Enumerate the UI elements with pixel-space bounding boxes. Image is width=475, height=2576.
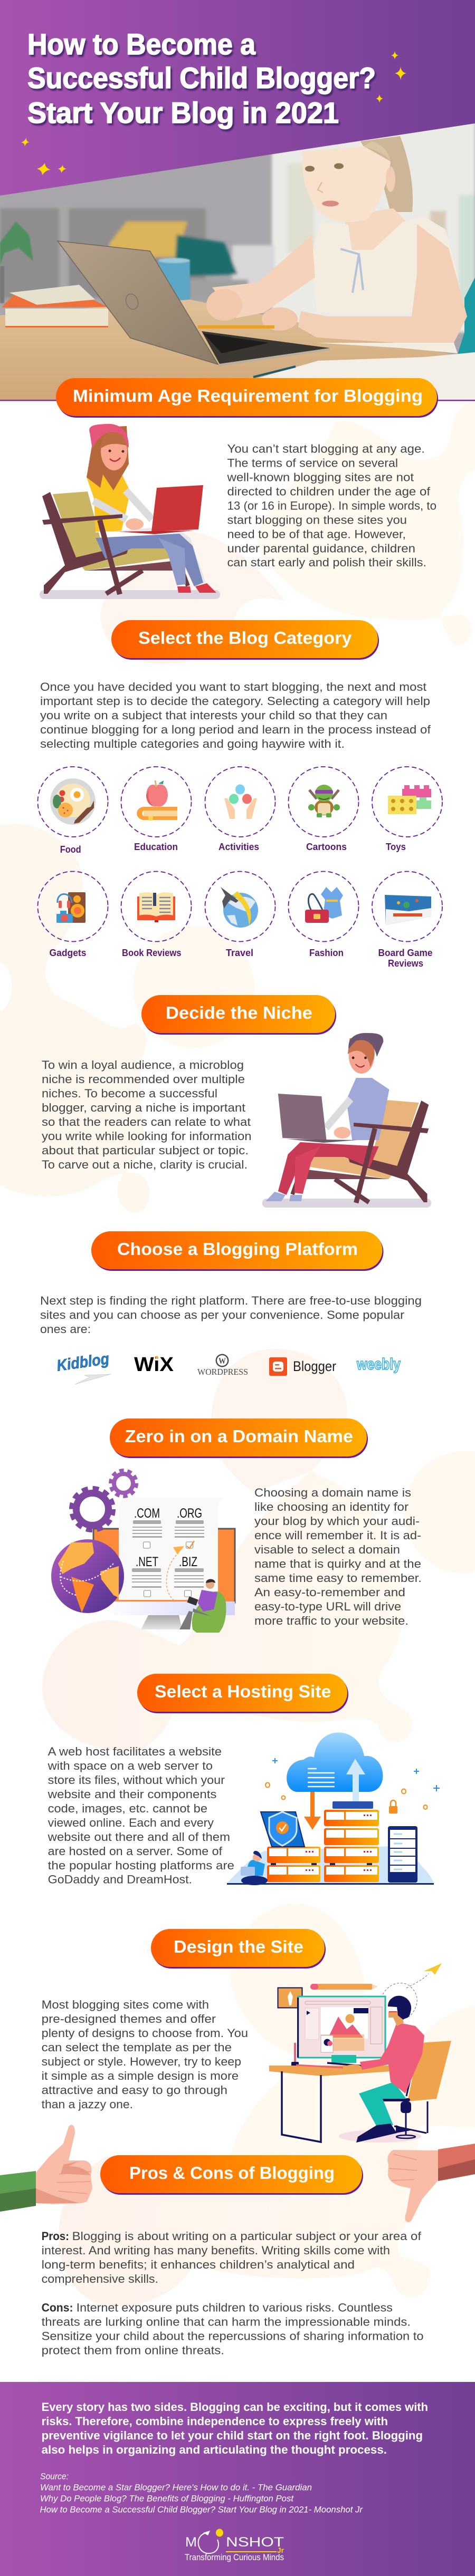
text: platform paragraph: ones are: [40, 1323, 91, 1336]
heading pill: Decide the Niche: Decide the Niche [166, 1003, 312, 1022]
conclusion text: risks. Therefore, combine independence to express freely with [42, 2415, 388, 2428]
decorative plus and ring icons [272, 1758, 440, 1791]
text: niche paragraph [42, 1058, 251, 1171]
label: category names: Reviews [388, 958, 423, 969]
category dashed circles [38, 767, 442, 942]
photo bottom rule [0, 400, 475, 401]
title: Successful Child Blogger? [27, 61, 376, 94]
text: hosting paragraph: viewed online. Each and every [48, 1816, 214, 1829]
text: platform paragraph: Next step is finding the right platform. There are free-to-use blogging [40, 1294, 422, 1307]
text: design paragraph [42, 1998, 248, 2111]
text: pros paragraph: Pros: [42, 2230, 69, 2243]
heading pill: Choose a Blogging Platform: Choose a Blogging Platform [117, 1239, 358, 1259]
illustration: cloud hosting servers [227, 1732, 440, 1885]
domain labels: .BIZ [179, 1555, 197, 1569]
text: cons paragraph: Cons: [42, 2301, 73, 2314]
heading pill: Select a Hosting Site: Select a Hosting Site [155, 1682, 331, 1701]
text: design paragraph: than a jazzy one. [42, 2098, 133, 2111]
text: domain paragraph: ence will remember it. It is ad- [254, 1529, 421, 1542]
text: niche paragraph: so that the readers can relate to what [42, 1115, 251, 1128]
frame [278, 1988, 302, 2008]
download arrow [304, 1792, 321, 1830]
globe [51, 1539, 124, 1613]
rack [388, 1826, 417, 1883]
label: category names: Food [60, 844, 81, 855]
heading pill: Design the Site [151, 1929, 326, 1969]
pencil [310, 1984, 378, 1990]
label: category names: Education [134, 842, 178, 852]
conclusion text: also helps in organizing and articulating the thought process. [42, 2443, 387, 2456]
logo: Kidblog [55, 1350, 111, 1384]
icon: education [137, 780, 177, 821]
text: minimum age paragraph: 13 (or 16 in Europe). In simple words, to [227, 499, 436, 513]
illustration: boy on chair with laptop [262, 1033, 431, 1208]
domain labels: .COM [134, 1506, 160, 1521]
text: category paragraph: you write on a subject that interests your child so that they can [40, 709, 387, 722]
icon: travel [221, 887, 258, 928]
text: minimum age paragraph: need to be of that age. However, [227, 527, 406, 541]
icon: cartoons [308, 785, 340, 817]
text: minimum age paragraph: can start early and polish their skills. [227, 556, 426, 569]
icon: gadgets [56, 892, 86, 923]
shadow [339, 2130, 421, 2143]
text: hosting paragraph: the popular hosting platforms are [48, 1859, 234, 1872]
sources: Want to Become a Star Blogger? Here's How to do it. - The Guardian [40, 2483, 312, 2492]
text: design paragraph: Most blogging sites come with [42, 1998, 209, 2011]
text: platform paragraph: sites and you can choose as per your convenience. Some popular [40, 1308, 404, 1321]
gears [73, 1471, 136, 1529]
logo: WordPress [197, 1354, 248, 1377]
heading pill: Design the Site: Design the Site [174, 1937, 303, 1956]
logo: Moonshot Jr [185, 2529, 284, 2562]
logo: Moonshot Jr: Jr [277, 2546, 284, 2554]
text: platform paragraph [40, 1294, 422, 1336]
domain labels: .NET [136, 1555, 158, 1569]
text: design paragraph: it simple as a simple design is more [42, 2069, 239, 2082]
icon: board game [385, 895, 431, 925]
heading pill: Pros & Cons of Blogging: Pros & Cons of Blogging [129, 2163, 335, 2183]
icon: sparkles [21, 51, 406, 175]
text: category paragraph [40, 680, 431, 750]
text: category paragraph: continue blogging for a long period and learn in the process instead of [40, 723, 431, 736]
icon: thumbs down [387, 2144, 475, 2222]
desk [269, 2063, 391, 2142]
logo: Moonshot Jr: NSHOT [226, 2535, 284, 2550]
heading pill: Select the Blog Category [111, 620, 379, 660]
text: domain paragraph: An easy-to-remember and [254, 1586, 405, 1599]
text: minimum age paragraph: directed to children under the age of [227, 485, 431, 498]
heading pill: Pros & Cons of Blogging [100, 2155, 363, 2195]
label: category names: Book Reviews [122, 948, 182, 958]
text: minimum age paragraph: well-known blogging sites are not [226, 470, 414, 484]
icon: padlock [389, 1800, 397, 1813]
header purple panel [0, 0, 475, 196]
label: category names: Fashion [309, 948, 344, 958]
text: domain paragraph: same time easy to remember. [254, 1571, 422, 1585]
text: niche paragraph: niche is recommended over multiple [42, 1073, 245, 1086]
text: pros paragraph: comprehensive skills. [42, 2272, 158, 2285]
icon: fashion [305, 887, 343, 923]
illustration: girl on chair with red laptop [40, 424, 220, 599]
domain labels [134, 1506, 202, 1569]
title [27, 27, 376, 129]
text: domain paragraph: more traffic to your website. [254, 1614, 408, 1627]
heading pill: Zero in on a Domain Name [110, 1419, 368, 1458]
illustration: domain names on monitor [51, 1471, 235, 1633]
logo: WordPress: W [218, 1357, 226, 1366]
conclusion text: Every story has two sides. Blogging can be exciting, but it comes with [42, 2400, 428, 2414]
text: domain paragraph: easy-to-type URL will drive [254, 1600, 401, 1613]
text: domain paragraph: like choosing an identity for [254, 1500, 408, 1513]
heading pill: Minimum Age Requirement for Blogging: Minimum Age Requirement for Blogging [73, 386, 423, 406]
logo: WiX: WiX [134, 1354, 174, 1376]
heading pill: Select the Blog Category: Select the Blog Category [138, 628, 352, 648]
text: minimum age paragraph: The terms of service on several [227, 457, 398, 469]
upload arrow [346, 1759, 365, 1801]
label: category names: Travel [226, 948, 253, 958]
title: Start Your Blog in 2021 [27, 96, 339, 129]
icon: thumbs up [0, 2125, 92, 2212]
text: cons paragraph: Internet exposure puts children to various risks. Countless [77, 2301, 393, 2314]
cloud [287, 1732, 383, 1792]
text: hosting paragraph: A web host facilitates a website [48, 1745, 222, 1758]
icon: food [50, 778, 96, 825]
text: cons paragraph: Sensitize your child about the repercussions of sharing information to [42, 2330, 424, 2342]
text: hosting paragraph: with space on a web server to [48, 1759, 213, 1772]
text: niche paragraph: To carve out a niche, clarity is crucial. [42, 1158, 248, 1171]
text: hosting paragraph: GoDaddy and DreamHost. [48, 1873, 192, 1886]
heading pill: Select a Hosting Site [137, 1674, 348, 1713]
server stack [267, 1801, 379, 1882]
logo: Blogger [269, 1357, 336, 1376]
icon: activities [224, 785, 257, 819]
logo: weebly: weebly [356, 1355, 401, 1373]
text: category paragraph: Once you have decided you want to start blogging, the next and most [40, 680, 426, 693]
text: cons paragraph: threats are lurking online that can harm the impressionable minds. [42, 2315, 411, 2329]
text: pros paragraph: Blogging is about writing on a particular subject or your area of [72, 2230, 422, 2243]
text: hosting paragraph: code, images, etc. cannot be [48, 1802, 207, 1815]
text: minimum age paragraph: start blogging on these sites you [227, 514, 407, 526]
text: cons paragraph: protect them from online threats. [42, 2343, 224, 2357]
pen holder [291, 2043, 299, 2066]
label: category names: Board Game [378, 948, 433, 958]
text: domain paragraph [254, 1486, 422, 1627]
title: How to Become a [27, 27, 256, 61]
text: design paragraph: attractive and easy to go through [42, 2083, 227, 2097]
heading pill: Zero in on a Domain Name: Zero in on a Domain Name [125, 1426, 353, 1446]
illustration: designer at desk [269, 1963, 451, 2143]
label: category names: Toys [386, 842, 406, 852]
text: category paragraph: important step is to decide the category. Selecting a category will help [40, 694, 430, 708]
text: domain paragraph: Choosing a domain name is [254, 1486, 411, 1499]
text: domain paragraph: your blog by which your audi- [254, 1514, 420, 1528]
hero photo: girl at laptop [0, 121, 475, 400]
paper plane [380, 1963, 442, 2017]
text: hosting paragraph [48, 1745, 234, 1886]
person with laptop [241, 1851, 268, 1885]
conclusion text [42, 2400, 428, 2456]
text: minimum age paragraph [226, 442, 436, 569]
designer [346, 1996, 424, 2143]
text: hosting paragraph: website out there and all of them [48, 1830, 230, 1844]
text: domain paragraph: name that is quirky and at the [254, 1557, 421, 1570]
text: niche paragraph: blogger, carving a niche is important [42, 1101, 245, 1114]
text: niche paragraph: you write while looking for information [42, 1130, 251, 1143]
footer panel [0, 2382, 475, 2576]
logo: Blogger: Blogger [293, 1358, 336, 1374]
sources: Source: [40, 2471, 69, 2482]
icon: book reviews [137, 892, 175, 922]
monitor [297, 1996, 385, 2063]
text: niche paragraph: niches. To become a successful [42, 1087, 217, 1100]
heading pill: Choose a Blogging Platform [91, 1231, 383, 1271]
text: category paragraph: selecting multiple categories and going haywire with it. [40, 737, 345, 750]
text: hosting paragraph: are hosted on a server. Some of [48, 1845, 223, 1858]
text: hosting paragraph: store its files, without which your [48, 1773, 225, 1787]
label: category names: Activities [218, 842, 259, 852]
text: niche paragraph: To win a loyal audience, a microblog [42, 1058, 244, 1072]
text: minimum age paragraph: You can’t start blogging at any age. [227, 442, 425, 456]
icon: toys [388, 785, 431, 814]
conclusion text: preventive vigilance to let your child start on the right foot. Blogging [42, 2429, 423, 2442]
text: design paragraph: can select the template as per the [42, 2041, 232, 2054]
text: domain paragraph: visable to select a domain [254, 1543, 400, 1556]
text: pros paragraph: long-term benefits; it enhances children’s analytical and [42, 2258, 355, 2271]
label: category names: Gadgets [50, 948, 87, 958]
label: category names: Cartoons [306, 842, 347, 852]
person with green beanbag [179, 1579, 226, 1633]
sources: Why Do People Blog? The Benefits of Blogging - Huffington Post [40, 2493, 294, 2504]
shield on laptop [261, 1812, 305, 1847]
sources: How to Become a Successful Child Blogger? Start Your Blog in 2021- Moonshot Jr [40, 2505, 363, 2514]
heading pill: Minimum Age Requirement for Blogging [56, 378, 438, 418]
label: category names [50, 842, 433, 969]
heading pill: Decide the Niche [141, 995, 336, 1035]
text: niche paragraph: about that particular subject or topic. [42, 1144, 249, 1157]
logo: WordPress: WORDPRESS [197, 1367, 248, 1377]
logo: Kidblog: Kidblog [55, 1350, 110, 1375]
logo: Moonshot Jr: M [185, 2535, 197, 2550]
background blobs [0, 401, 475, 2306]
text: hosting paragraph: website and their components [48, 1788, 217, 1801]
text: design paragraph: plenty of designs to choose from. You [42, 2027, 248, 2040]
text: pros paragraph: interest. And writing has many benefits. Writing skills come with [42, 2244, 390, 2257]
chair [381, 2041, 451, 2138]
text: pros paragraph [42, 2230, 422, 2285]
domain labels: .ORG [177, 1506, 202, 1521]
text: minimum age paragraph: under parental guidance, children [227, 542, 415, 555]
text: design paragraph: subject or style. However, try to keep [42, 2055, 241, 2068]
logo: Moonshot Jr: Transforming Curious Minds [185, 2552, 284, 2562]
sources [40, 2471, 363, 2514]
text: cons paragraph [42, 2301, 424, 2357]
text: design paragraph: pre-designed themes and offer [42, 2012, 216, 2025]
